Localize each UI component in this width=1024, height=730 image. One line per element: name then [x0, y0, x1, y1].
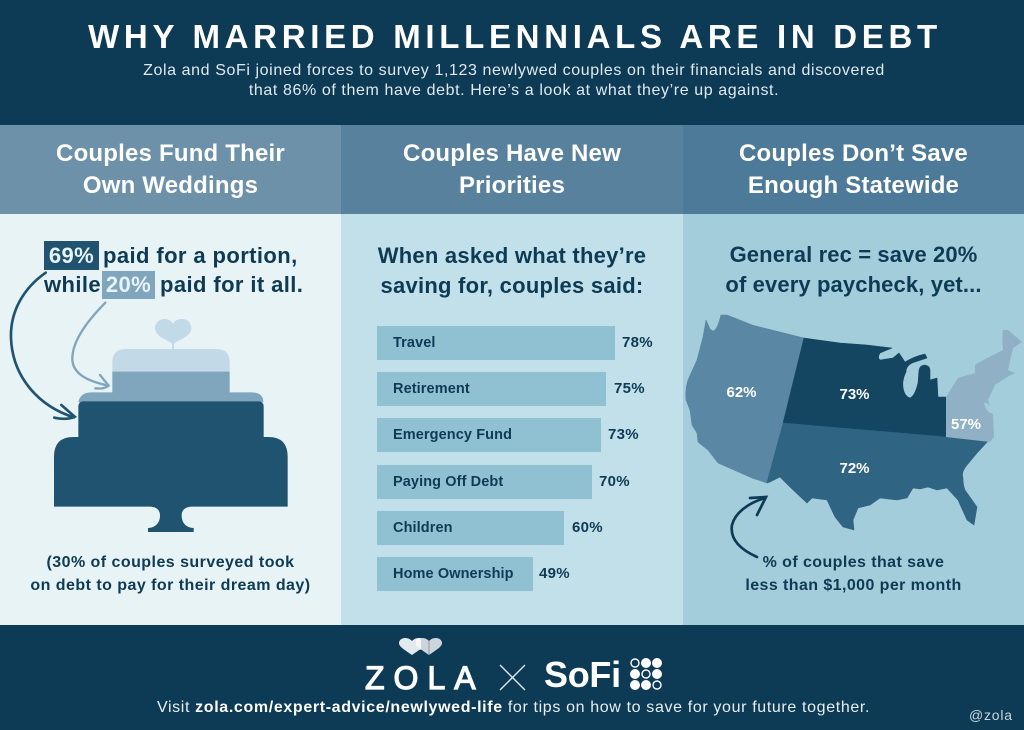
panel: priorities — [341, 125, 683, 625]
bar chart — [377, 326, 653, 591]
sofi dots — [630, 658, 662, 690]
south region: 72% — [839, 460, 870, 477]
sofi logo — [544, 654, 662, 695]
20% badge: 20% — [106, 272, 151, 297]
title: WHY MARRIED MILLENNIALS ARE IN DEBT — [88, 18, 942, 55]
heart topper — [155, 319, 191, 349]
bar chart: 49% — [539, 565, 570, 582]
heading: states: Enough Statewide — [748, 172, 959, 199]
subheading: rec: of every paycheck, yet... — [725, 272, 982, 297]
bar chart: Retirement — [393, 381, 470, 397]
sofi wordmark: SoFi — [544, 654, 621, 695]
stat text — [44, 241, 303, 299]
heading: states — [683, 125, 1024, 214]
stat text: paid for it all. — [160, 272, 303, 297]
handle: @zola — [969, 707, 1013, 723]
bar chart: Children — [393, 520, 453, 536]
map note: % of couples that save — [763, 554, 944, 571]
northeast region: 57% — [951, 416, 981, 433]
heading: weddings — [0, 125, 341, 214]
west region: 62% — [726, 384, 757, 401]
bar chart: Home Ownership — [393, 566, 514, 582]
lower tiers and stand — [54, 401, 288, 532]
note: (30% of couples surveyed took — [46, 554, 295, 571]
bar chart: 78% — [622, 334, 653, 351]
subheading: rec: General rec = save 20% — [730, 242, 977, 267]
stat text: while — [44, 272, 101, 297]
arrow: map note — [732, 497, 766, 557]
intro text — [143, 62, 885, 99]
subheading: saving: saving for, couples said: — [380, 273, 644, 298]
arrow: 20% — [72, 303, 109, 389]
subheading: saving: When asked what they’re — [378, 243, 646, 268]
panel: states — [683, 125, 1024, 625]
midwest region — [783, 338, 946, 437]
note: on debt to pay for their dream day) — [30, 576, 311, 594]
bar chart: Emergency Fund — [393, 427, 512, 443]
map note: less than $1,000 per month — [745, 576, 962, 594]
heading: priorities: Priorities — [459, 172, 565, 199]
subheading: saving — [378, 243, 646, 298]
bar chart: 60% — [572, 519, 603, 536]
heading: priorities: Couples Have New — [403, 140, 621, 167]
intro text: Zola and SoFi joined forces to survey 1,123 newlywed couples on their financials and discovered — [143, 62, 885, 79]
zola wordmark: ZOLA — [365, 660, 485, 696]
heading: weddings: Own Weddings — [83, 172, 258, 199]
south region — [767, 423, 988, 530]
header band — [0, 0, 1024, 125]
bar chart: 70% — [599, 473, 630, 490]
subheading: rec — [725, 242, 982, 297]
69% badge: 69% — [49, 243, 94, 268]
zola logo — [365, 638, 485, 696]
panel: weddings — [0, 125, 341, 625]
bar chart: 73% — [608, 426, 639, 443]
bar chart: Travel — [393, 335, 436, 351]
footer link text: Visit zola.com/expert-advice/newlywed-life for tips on how to save for your future together. — [157, 699, 870, 716]
intro text: that 86% of them have debt. Here’s a look at what they’re up against. — [249, 82, 779, 99]
heading: states: Couples Don’t Save — [739, 140, 968, 167]
zola hearts — [399, 638, 442, 655]
bar chart: Paying Off Debt — [393, 474, 503, 490]
northeast region — [946, 330, 1022, 442]
top tier — [112, 349, 230, 372]
heading: weddings: Couples Fund Their — [56, 140, 285, 167]
note — [30, 554, 311, 594]
x mark — [500, 664, 526, 690]
icon: wedding cake — [10, 271, 288, 532]
midwest region: 73% — [839, 386, 870, 403]
heading: priorities — [341, 125, 683, 214]
frosting — [78, 372, 263, 402]
us map — [686, 314, 1022, 558]
map note — [745, 554, 962, 594]
arrow: 69% — [11, 273, 75, 419]
bar chart: 75% — [614, 380, 645, 397]
footer band — [0, 625, 1024, 730]
west region — [686, 315, 804, 483]
stat text: paid for a portion, — [103, 243, 298, 268]
